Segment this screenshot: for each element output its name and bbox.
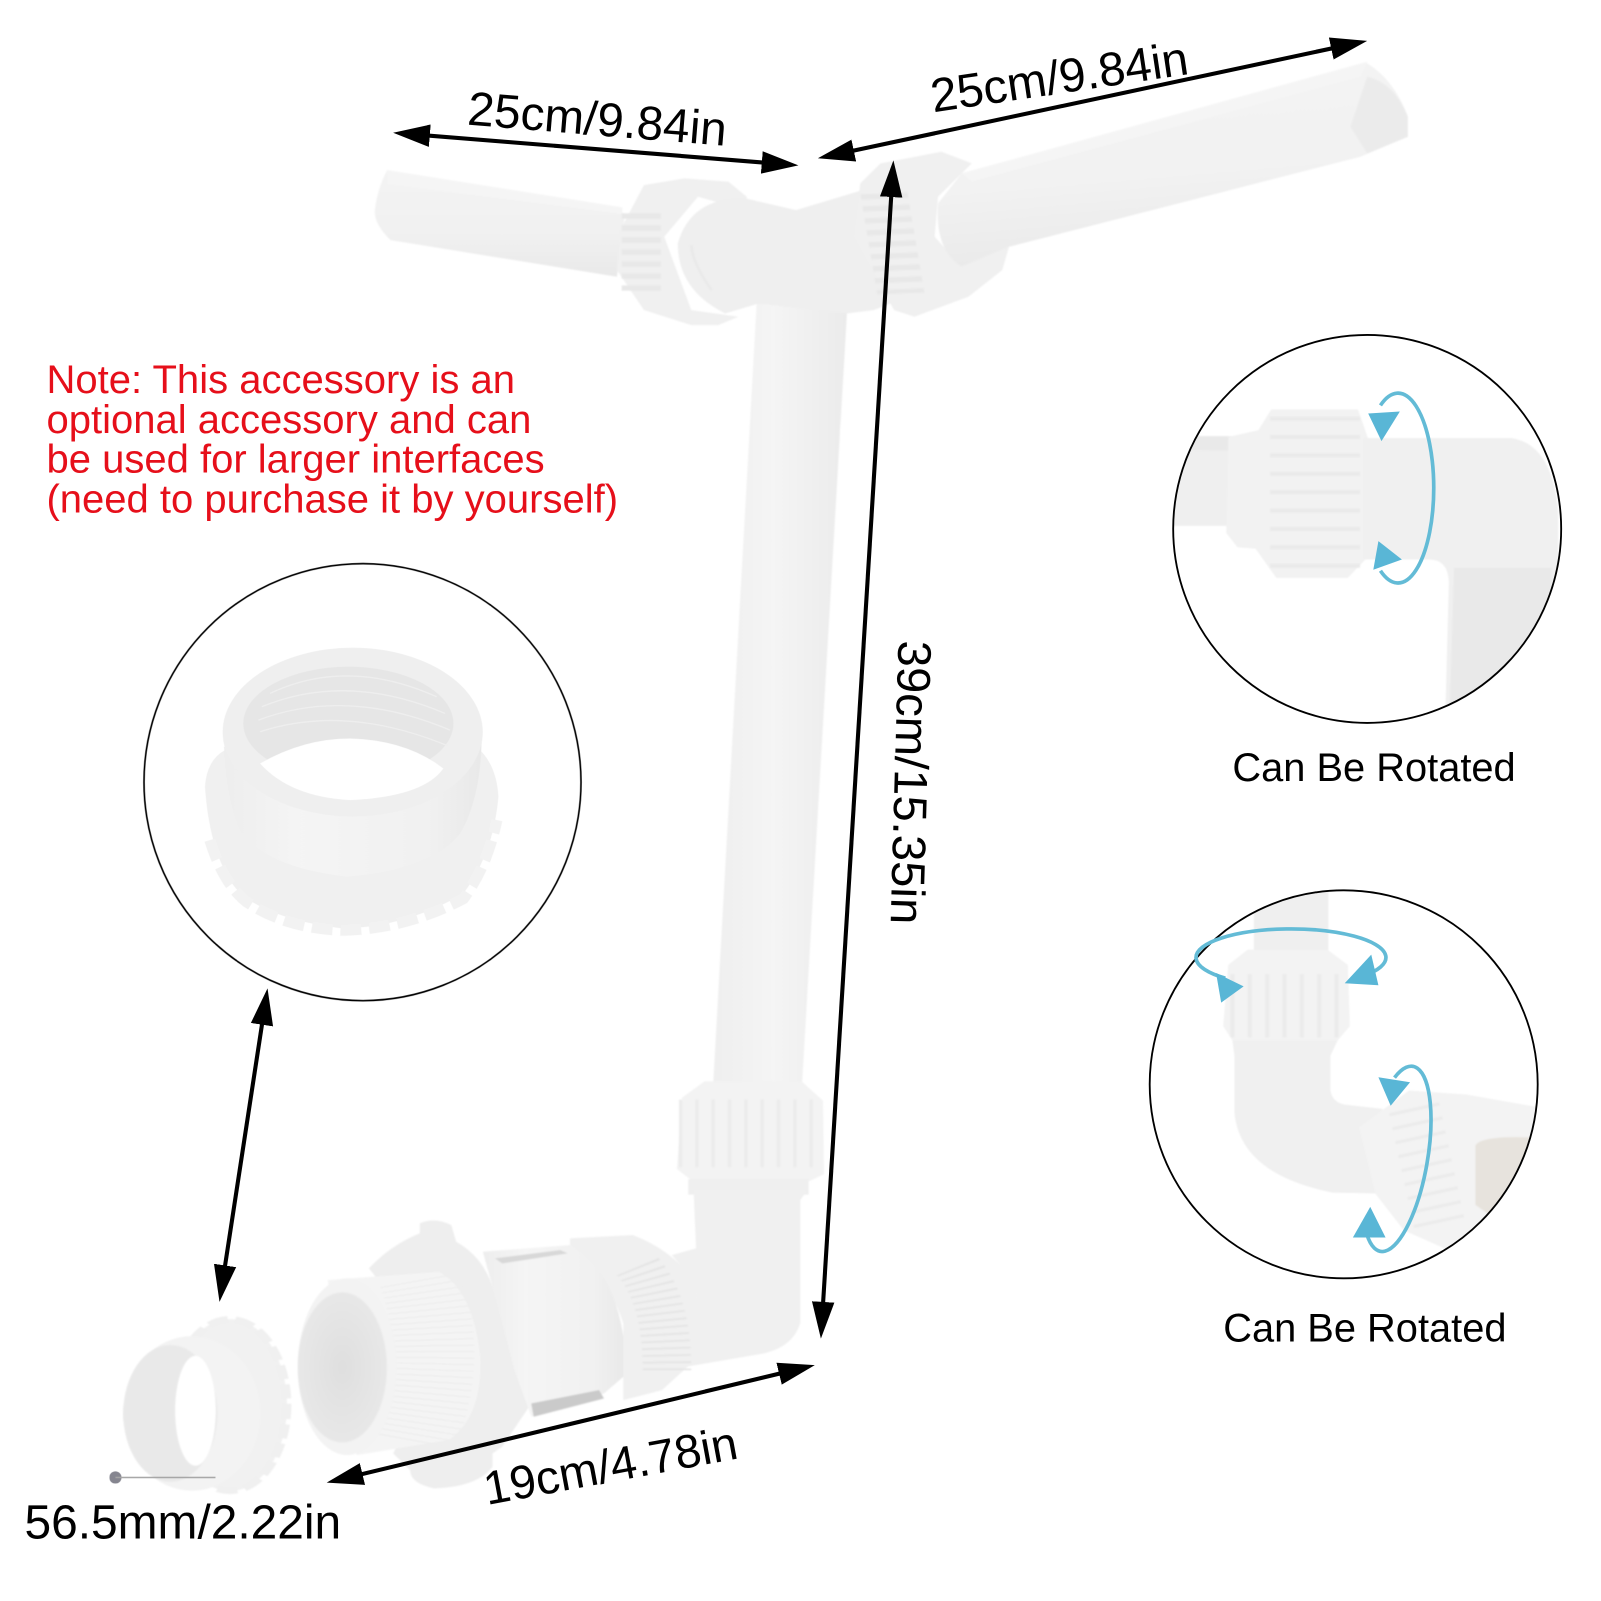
ring opening (260, 738, 443, 800)
inlet nut (570, 1235, 701, 1400)
horizontal rotation arrow (1196, 929, 1386, 1003)
caption: can be rotated bottom: Can Be Rotated (1223, 1307, 1507, 1351)
flange (369, 1220, 531, 1488)
elbow (1232, 1040, 1389, 1194)
note: red optional accessory text: optional accessory and can (46, 398, 531, 442)
circle outline (1173, 335, 1561, 723)
rim (223, 648, 483, 816)
thread lines (258, 676, 450, 747)
right nut (854, 152, 1009, 317)
left arm (375, 170, 625, 277)
upright tube (1254, 892, 1328, 950)
note: red optional accessory text: (need to purchase it by yourself) (46, 478, 618, 522)
arrow: height dimension (822, 171, 893, 1328)
slot top (495, 1250, 568, 1263)
tilted rotation arrow (1353, 1064, 1443, 1257)
nut flange with teeth (205, 750, 498, 928)
ribbed nut (1250, 409, 1368, 578)
caption: can be rotated top: Can Be Rotated (1232, 746, 1516, 790)
label: height 39cm: 39cm/15.35in (880, 640, 941, 925)
angled nut (1376, 1091, 1535, 1248)
label: left arm 25cm: 25cm/9.84in (466, 83, 729, 157)
product: T-shaped pipe fitting (123, 62, 1408, 1491)
rotation arrow (1368, 393, 1434, 583)
arrow: left arm dimension (403, 134, 788, 165)
elbow (672, 1190, 807, 1367)
collar shading (691, 245, 712, 290)
threaded inner wall (243, 667, 453, 780)
right arm (938, 63, 1408, 267)
pointer: ring measure line (109, 1471, 215, 1484)
circle outline (1150, 890, 1538, 1278)
open pipe mouth (298, 1278, 397, 1455)
panel: rotation detail top (1164, 335, 1561, 735)
small adapter ring (123, 1319, 287, 1491)
left arm ridge (387, 170, 622, 214)
inner opening (1475, 1137, 1532, 1217)
right arm end cap (1350, 77, 1408, 153)
cylinder body (224, 740, 482, 877)
T body (678, 187, 941, 313)
top T assembly (375, 62, 1408, 325)
slot bottom (531, 1390, 604, 1417)
horizontal tube (1174, 450, 1228, 526)
ribbed nut (1223, 950, 1350, 1040)
label: ring diameter: 56.5mm/2.22in (25, 1497, 341, 1550)
note: red optional accessory text: Note: This accessory is an (46, 358, 515, 402)
lower assembly (123, 1190, 807, 1491)
elbow lower shade (1449, 568, 1552, 735)
inlet body (483, 1245, 623, 1417)
arrow: adapter link (221, 998, 266, 1292)
tube ridge (1164, 436, 1252, 451)
note: red optional accessory text: be used for larger interfaces (46, 438, 545, 482)
vertical pipe (713, 286, 848, 1093)
lower nut (677, 1081, 824, 1182)
panel: adapter close-up circle (144, 564, 581, 1001)
flange knurl (210, 820, 497, 930)
threaded body (328, 1272, 481, 1455)
arrow: right arm dimension (828, 43, 1357, 156)
label: bottom 19cm: 19cm/4.78in (479, 1416, 741, 1515)
panel: rotation detail bottom (1150, 883, 1542, 1278)
collar (1226, 431, 1257, 548)
elbow (1366, 438, 1558, 705)
left nut (617, 178, 747, 325)
label: right arm 25cm: 25cm/9.84in (927, 32, 1192, 123)
right arm ridge (962, 62, 1367, 182)
arrow: bottom length dimension (337, 1367, 805, 1480)
nut base ring (688, 1179, 809, 1195)
